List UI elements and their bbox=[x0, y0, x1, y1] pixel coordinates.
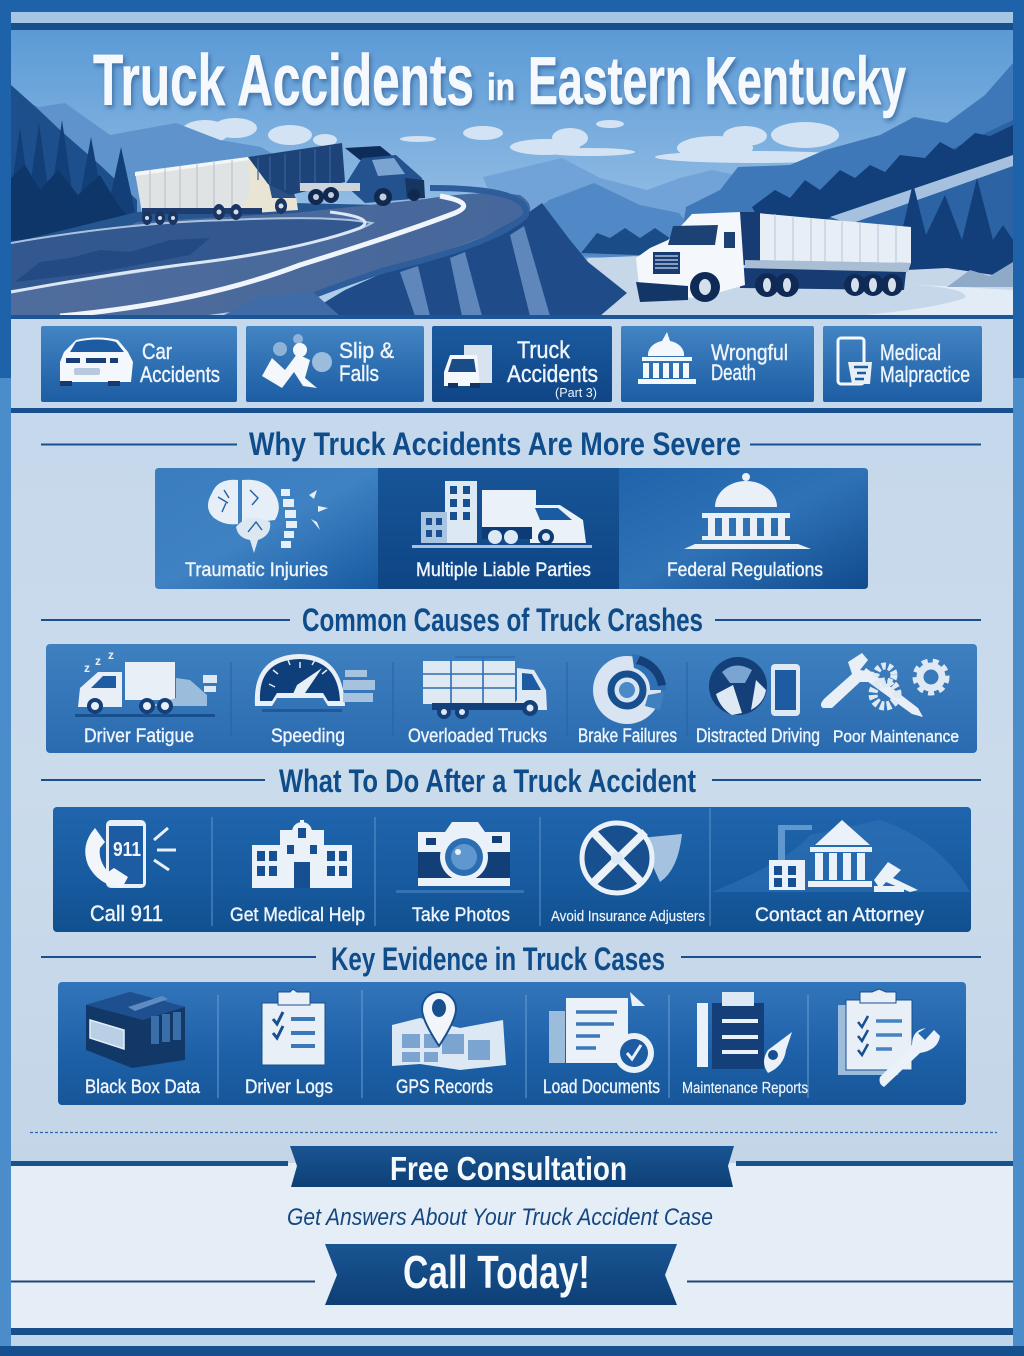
sky bbox=[11, 30, 1013, 316]
icon: tired truck: z bbox=[84, 661, 90, 675]
label: Car bbox=[142, 339, 172, 364]
icon: phone and medical kit bbox=[838, 338, 872, 384]
label: Traumatic Injuries bbox=[185, 560, 328, 581]
label: Malpractice bbox=[880, 362, 970, 387]
icon: document with check bbox=[549, 992, 654, 1073]
label: (Part 3) bbox=[555, 385, 597, 400]
banner: free consultation bbox=[290, 1146, 734, 1187]
nav: car accidents bbox=[41, 326, 237, 402]
card: overloaded trucks bbox=[408, 657, 547, 747]
heading: What To Do After a Truck Accident bbox=[279, 763, 696, 799]
nav: slip and falls bbox=[246, 326, 424, 402]
near left slope bbox=[26, 203, 372, 240]
label: Call 911 bbox=[90, 901, 163, 926]
icon: capitol bbox=[684, 473, 811, 549]
title: Truck Accidents bbox=[93, 41, 474, 121]
footer bbox=[11, 1146, 1013, 1328]
icon: hospital bbox=[252, 820, 352, 888]
icon: brake disc bbox=[593, 654, 666, 724]
dividers bbox=[212, 808, 710, 926]
panel background bbox=[58, 982, 966, 1105]
icon: tired truck: z bbox=[95, 654, 101, 668]
label: Accidents bbox=[507, 361, 598, 388]
icon: speedometer bbox=[255, 654, 375, 712]
label: Slip & bbox=[339, 338, 394, 363]
label bbox=[507, 337, 598, 400]
card: maintenance reports bbox=[682, 992, 808, 1097]
subtitle: Get Answers About Your Truck Accident Case bbox=[287, 1204, 713, 1231]
label: Avoid Insurance Adjusters bbox=[551, 908, 705, 925]
label: GPS Records bbox=[396, 1077, 493, 1098]
distant ground right bbox=[560, 256, 1013, 316]
card: distracted driving bbox=[696, 657, 820, 747]
nav: medical malpractice bbox=[823, 326, 982, 402]
icon: overloaded truck bbox=[423, 657, 547, 719]
card: call 911 bbox=[85, 820, 176, 926]
title: in bbox=[487, 67, 515, 109]
title bbox=[93, 41, 906, 121]
icon: courthouse bbox=[638, 332, 696, 384]
icon: steering wheel and phone bbox=[709, 657, 800, 716]
icon: prohibited shield bbox=[582, 823, 682, 893]
hero illustration bbox=[4, 30, 1013, 316]
label: Black Box Data bbox=[85, 1077, 200, 1098]
dashed divider bbox=[30, 1132, 997, 1134]
card: medical help bbox=[230, 820, 365, 926]
banner: free consultation: Free Consultation bbox=[390, 1150, 627, 1187]
icon: car bbox=[60, 338, 133, 386]
dividers bbox=[231, 662, 687, 736]
icon: courthouse and gavel bbox=[769, 820, 918, 892]
card: take photos bbox=[396, 822, 524, 926]
label: Poor Maintenance bbox=[833, 727, 959, 746]
card: poor maintenance bbox=[821, 653, 959, 746]
label bbox=[140, 339, 220, 387]
panel background bbox=[46, 644, 977, 753]
section: why severe bbox=[41, 426, 981, 589]
label: Wrongful bbox=[711, 340, 788, 365]
panel background bbox=[155, 468, 868, 589]
icon: clipboard bbox=[262, 989, 325, 1065]
icon: tired truck: z bbox=[108, 648, 114, 662]
road loop interior bbox=[5, 218, 372, 292]
icon: truck bbox=[444, 345, 492, 388]
card: black box bbox=[85, 992, 200, 1098]
bottom bands bbox=[0, 1328, 1024, 1356]
heading: Key Evidence in Truck Cases bbox=[331, 941, 665, 977]
card: federal regulations bbox=[667, 473, 823, 581]
cliff edge and rock face bbox=[222, 188, 627, 316]
card: speeding bbox=[255, 654, 375, 747]
rule lines bbox=[11, 1161, 1013, 1282]
label: Brake Failures bbox=[578, 726, 677, 747]
label: Medical bbox=[880, 340, 941, 365]
icon: wrench and gears bbox=[821, 653, 947, 717]
footer background bbox=[11, 1163, 1013, 1328]
icon: map pin bbox=[392, 992, 506, 1070]
card: clipboard and wrench icon bbox=[838, 989, 940, 1087]
label: Multiple Liable Parties bbox=[416, 560, 591, 581]
label: Load Documents bbox=[543, 1077, 660, 1098]
banner: call today: Call Today! bbox=[403, 1246, 590, 1298]
nav: truck accidents bbox=[432, 326, 612, 402]
label: Accidents bbox=[140, 362, 220, 387]
truck: white trailer on the road bbox=[135, 157, 298, 225]
dividers bbox=[218, 990, 808, 1098]
label bbox=[711, 340, 788, 385]
road markings bbox=[60, 196, 464, 316]
label bbox=[339, 338, 394, 386]
road bbox=[11, 193, 530, 316]
label: Overloaded Trucks bbox=[408, 726, 547, 747]
far mountains bbox=[483, 158, 732, 260]
section: what to do bbox=[41, 763, 981, 932]
label: Driver Fatigue bbox=[84, 726, 194, 747]
left dark tree slope bbox=[4, 85, 140, 245]
label: Driver Logs bbox=[245, 1077, 333, 1098]
icon: report bbox=[697, 992, 792, 1073]
label: Truck bbox=[517, 337, 571, 364]
attorney hill backdrop bbox=[712, 820, 970, 892]
label: Speeding bbox=[271, 726, 345, 747]
label: Contact an Attorney bbox=[755, 905, 924, 926]
main content background bbox=[11, 413, 1013, 1163]
icon: slipping figure bbox=[262, 334, 332, 388]
icon: brain and spine bbox=[208, 480, 328, 553]
nav: wrongful death bbox=[621, 326, 814, 402]
label: Federal Regulations bbox=[667, 560, 823, 581]
icon: tired truck bbox=[75, 648, 217, 717]
card: multiple liable parties bbox=[412, 481, 592, 581]
panel background bbox=[53, 807, 971, 932]
label: Distracted Driving bbox=[696, 726, 820, 747]
navigation strip background bbox=[11, 315, 1013, 413]
icon: phone 911: 911 bbox=[113, 839, 141, 861]
label: Get Medical Help bbox=[230, 905, 365, 926]
label: Falls bbox=[339, 361, 379, 386]
card: contact attorney bbox=[755, 820, 924, 926]
section: key evidence bbox=[41, 941, 981, 1105]
section: common causes bbox=[41, 602, 981, 753]
label: Maintenance Reports bbox=[682, 1080, 808, 1097]
card: brake failures bbox=[578, 654, 677, 747]
banner: call today bbox=[325, 1244, 677, 1305]
card: traumatic injuries bbox=[185, 480, 328, 581]
heading: Why Truck Accidents Are More Severe bbox=[249, 426, 741, 462]
label bbox=[880, 340, 970, 387]
clouds bbox=[181, 118, 855, 163]
icon: buildings and truck bbox=[412, 481, 592, 548]
icon: camera bbox=[396, 822, 524, 893]
label: Death bbox=[711, 360, 756, 385]
card: avoid adjusters bbox=[551, 823, 705, 925]
truck: white semi in the foreground bbox=[636, 212, 911, 302]
card: gps bbox=[392, 992, 506, 1098]
label: Take Photos bbox=[412, 905, 510, 926]
card: driver logs bbox=[245, 989, 333, 1098]
truck: dark rig on the road bbox=[248, 143, 425, 206]
heading: Common Causes of Truck Crashes bbox=[302, 602, 703, 638]
card: driver fatigue bbox=[75, 648, 217, 747]
right forests bbox=[752, 125, 1013, 220]
top dark band and side frame bbox=[0, 0, 1024, 378]
icon: black box bbox=[86, 992, 185, 1068]
card: load documents bbox=[543, 992, 660, 1098]
